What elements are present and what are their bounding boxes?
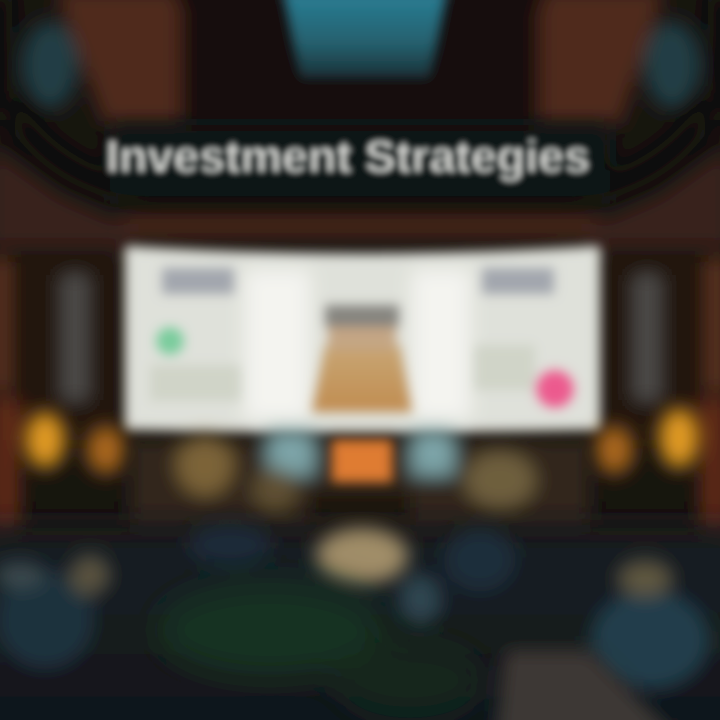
floor aisle <box>495 650 680 720</box>
foreground plant <box>155 580 485 718</box>
icon: green marker <box>156 327 184 355</box>
seated figure highlight <box>316 528 408 584</box>
ceiling <box>0 0 720 125</box>
columns: left and right <box>0 250 720 530</box>
bright screen bands <box>245 270 470 420</box>
audience <box>0 523 720 720</box>
dark arched title band <box>15 95 705 205</box>
stage below screen <box>130 430 590 530</box>
screen panel blobs <box>150 268 554 401</box>
wood wall <box>0 145 720 255</box>
icon: pink marker <box>536 370 574 408</box>
title: Investment Strategies <box>106 131 590 182</box>
skylight <box>283 0 447 78</box>
stage lamps <box>25 408 699 474</box>
central building graphic <box>312 305 412 412</box>
presentation screen <box>125 246 600 433</box>
podium glow <box>332 440 392 482</box>
